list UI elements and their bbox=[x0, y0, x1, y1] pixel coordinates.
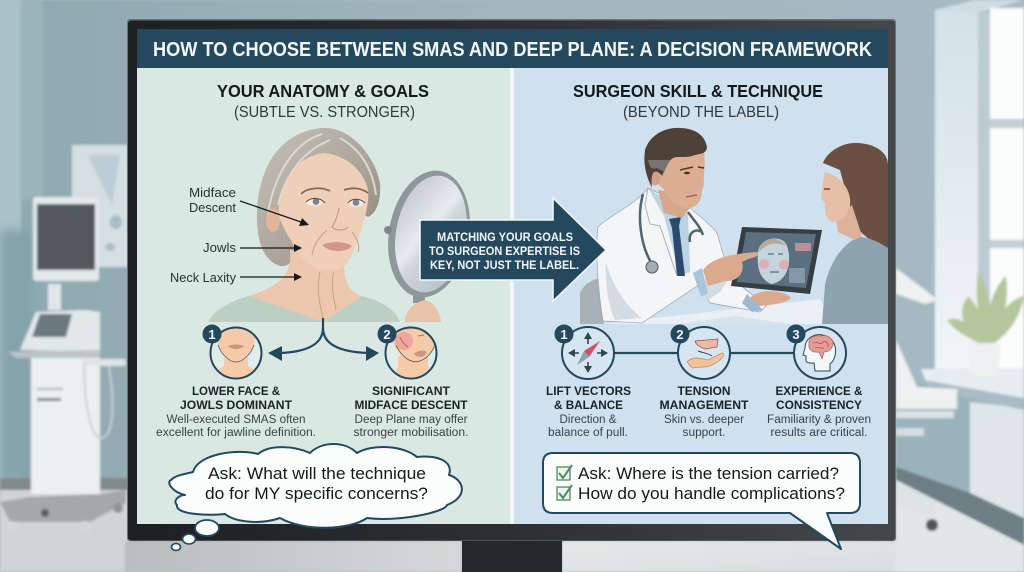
cuff bbox=[693, 268, 708, 297]
patient neck bbox=[836, 205, 862, 240]
illustration: woman with mirror bbox=[208, 128, 480, 322]
chair bbox=[580, 278, 604, 324]
label: midface descent bbox=[189, 185, 309, 226]
right panel heading: SURGEON SKILL & TECHNIQUE bbox=[573, 81, 823, 101]
branching arrow bbox=[268, 318, 379, 361]
right panel heading: (BEYOND THE LABEL) bbox=[623, 104, 779, 121]
left icon 2: midface: 2 bbox=[383, 327, 391, 342]
left text 1 bbox=[156, 384, 316, 439]
central arrow callout: KEY, NOT JUST THE LABEL. bbox=[430, 260, 579, 272]
left text 1: JOWLS DOMINANT bbox=[180, 398, 293, 412]
label: neck laxity: Neck Laxity bbox=[170, 270, 236, 285]
right text 3 bbox=[767, 384, 871, 439]
right icon 1: compass bbox=[554, 324, 614, 379]
hand holding mirror bbox=[405, 300, 441, 322]
coat shading bbox=[606, 262, 730, 320]
shirt and tie bbox=[648, 188, 690, 276]
left icon 1: lower face: 1 bbox=[208, 327, 216, 342]
right text 2: Skin vs. deeper bbox=[664, 414, 744, 426]
left text 1: Well-executed SMAS often bbox=[166, 414, 306, 426]
neck and chest bbox=[250, 250, 362, 322]
panel: surgeon skill and technique bbox=[514, 68, 888, 524]
neck bbox=[658, 190, 690, 218]
table bbox=[603, 299, 835, 324]
right text 3: CONSISTENCY bbox=[776, 398, 862, 412]
right icon 3: brain: 3 bbox=[792, 327, 800, 342]
tablet bbox=[731, 227, 822, 294]
illustration: doctor and patient bbox=[580, 128, 888, 324]
right text 3: Familiarity & proven bbox=[767, 414, 871, 426]
label: midface descent: Descent bbox=[189, 200, 236, 215]
monitor stand bbox=[462, 540, 562, 572]
stethoscope bbox=[640, 194, 703, 264]
thought bubble bbox=[169, 444, 462, 550]
eyes and brows bbox=[301, 188, 368, 207]
lips bbox=[322, 242, 352, 251]
mirror bbox=[378, 164, 480, 304]
thought bubble: Ask: What will the technique bbox=[208, 464, 426, 483]
face bbox=[279, 153, 368, 270]
hair strands bbox=[268, 134, 376, 212]
left panel heading: (SUBTLE VS. STRONGER) bbox=[234, 104, 415, 121]
right text 1: & BALANCE bbox=[554, 398, 623, 412]
right icon 2: tension hand: 2 bbox=[676, 327, 684, 342]
plant bbox=[947, 272, 1024, 347]
coat bbox=[597, 188, 766, 323]
hair bbox=[257, 128, 380, 266]
right text 1 bbox=[546, 384, 631, 439]
left text 2: SIGNIFICANT bbox=[372, 384, 451, 398]
right icon 1: compass: 1 bbox=[560, 327, 568, 342]
hand under tablet bbox=[750, 291, 791, 306]
central arrow callout bbox=[420, 198, 606, 301]
right text 2: TENSION bbox=[678, 384, 730, 398]
left text 1: LOWER FACE & bbox=[192, 384, 280, 398]
far sleeve bbox=[742, 294, 763, 312]
pot bbox=[967, 343, 1001, 376]
medical device bbox=[0, 197, 126, 533]
doctor temple bbox=[648, 160, 670, 172]
patient face bbox=[821, 172, 850, 222]
right text 1: balance of pull. bbox=[548, 427, 628, 439]
right text 1: LIFT VECTORS bbox=[546, 384, 631, 398]
left icon 2: midface bbox=[378, 324, 437, 380]
right icon 2: tension hand bbox=[670, 324, 730, 379]
right text 3: EXPERIENCE & bbox=[776, 384, 863, 398]
doctor hair bbox=[644, 128, 707, 188]
chestpiece bbox=[646, 261, 658, 273]
thought bubble: do for MY specific concerns? bbox=[205, 484, 428, 503]
window sill bbox=[921, 368, 1024, 400]
left icon 1: lower face bbox=[202, 324, 264, 380]
left text 2: stronger mobilisation. bbox=[354, 427, 468, 439]
patient body bbox=[822, 237, 888, 324]
left panel heading: YOUR ANATOMY & GOALS bbox=[217, 81, 429, 101]
right text 3: results are critical. bbox=[770, 427, 868, 439]
right panel heading bbox=[573, 81, 823, 121]
window bbox=[935, 0, 1024, 374]
right icon 3: brain bbox=[786, 324, 846, 379]
right text 1: Direction & bbox=[560, 414, 617, 426]
central arrow callout: TO SURGEON EXPERTISE IS bbox=[429, 246, 580, 258]
patient eye bbox=[824, 188, 830, 190]
nose and wrinkles bbox=[332, 208, 348, 230]
doctor face details bbox=[680, 167, 704, 170]
speech bubble checklist bbox=[543, 453, 860, 549]
panel divider bbox=[510, 68, 514, 524]
left panel heading bbox=[217, 81, 429, 121]
check item 2: How do you handle complications? bbox=[578, 484, 845, 503]
screen bbox=[137, 29, 888, 524]
woman's shirt bbox=[208, 295, 400, 322]
exam bed bbox=[896, 268, 957, 531]
left text 2: MIDFACE DESCENT bbox=[354, 398, 468, 412]
anatomy labels bbox=[170, 185, 309, 285]
ear bbox=[266, 208, 280, 232]
panel: your anatomy and goals bbox=[137, 68, 510, 524]
title: HOW TO CHOOSE BETWEEN SMAS AND DEEP PLANE: A DECISION FRAMEWORK bbox=[153, 39, 873, 61]
lower wall, radiator, baseboard, floor bbox=[896, 380, 1024, 572]
label: midface descent: Midface bbox=[189, 185, 236, 200]
central arrow callout: MATCHING YOUR GOALS bbox=[437, 232, 573, 244]
patient hair bbox=[823, 143, 888, 250]
right text 2: support. bbox=[682, 427, 726, 439]
wall poster bbox=[72, 145, 128, 267]
left text 1: excellent for jawline definition. bbox=[156, 427, 316, 439]
left text 2: Deep Plane may offer bbox=[354, 414, 468, 426]
right text 2 bbox=[660, 384, 749, 439]
check item 1: Ask: Where is the tension carried? bbox=[578, 464, 839, 483]
label: jowls: Jowls bbox=[203, 240, 236, 255]
doctor ear bbox=[652, 172, 660, 186]
doctor head bbox=[658, 152, 705, 208]
left text 2 bbox=[354, 384, 468, 439]
connector line bbox=[610, 352, 798, 354]
pointing hand bbox=[703, 252, 758, 286]
header bar bbox=[137, 29, 888, 68]
right text 2: MANAGEMENT bbox=[660, 398, 749, 412]
monitor frame bbox=[127, 19, 896, 541]
